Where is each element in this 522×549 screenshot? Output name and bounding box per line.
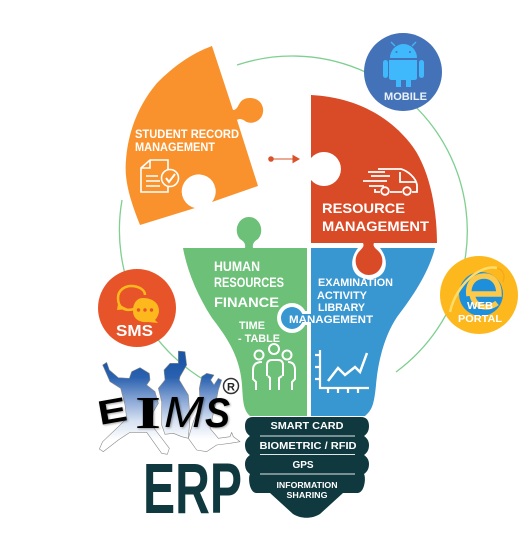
logo lettering: M — [164, 388, 204, 437]
base labels: GPS — [292, 460, 314, 471]
icon: people — [253, 344, 295, 390]
badge: sms: SMS — [116, 323, 153, 340]
text: human resources finance: TIME — [239, 320, 265, 332]
panel: blue examination — [311, 248, 435, 416]
base labels: INFORMATION — [276, 481, 338, 490]
figures — [99, 351, 240, 454]
icon: line chart — [315, 350, 369, 393]
panel: student record management — [126, 46, 263, 225]
panel: green human resources — [183, 217, 307, 416]
text: human resources finance: FINANCE — [214, 294, 279, 310]
logo: EIMS — [95, 351, 240, 454]
logo lettering: I — [135, 387, 161, 438]
badge: web portal: PORTAL — [458, 313, 503, 325]
icon: delivery van — [363, 169, 417, 195]
icon: chat bubbles — [117, 286, 159, 323]
badge: sms — [98, 269, 176, 347]
text: human resources finance — [214, 258, 284, 345]
text: examination activity library management: ACTIVITY — [317, 290, 368, 302]
badge: web portal — [440, 256, 518, 334]
base labels: BIOMETRIC / RFID — [260, 441, 356, 452]
text: examination activity library management — [289, 277, 393, 326]
text: human resources finance: HUMAN — [214, 258, 260, 274]
connector: blue puzzle tab — [277, 303, 311, 333]
panel: bulb base — [245, 417, 369, 518]
text: examination activity library management: EXAMINATION — [318, 277, 393, 289]
heading: student record: STUDENT RECORD — [135, 129, 239, 141]
text: examination activity library management: MANAGEMENT — [289, 314, 373, 326]
logo lettering — [95, 387, 230, 438]
logo lettering: S — [205, 389, 230, 436]
heading: student record: MANAGEMENT — [135, 142, 215, 154]
dividers — [260, 436, 355, 474]
base labels: SHARING — [286, 491, 328, 500]
base labels — [260, 421, 356, 500]
heading: resource management: MANAGEMENT — [322, 218, 429, 234]
badge: mobile: MOBILE — [384, 91, 427, 103]
text: human resources finance: RESOURCES — [214, 274, 284, 290]
registered mark: R — [227, 382, 235, 394]
panel: resource management — [311, 95, 437, 279]
base labels: SMART CARD — [270, 421, 344, 432]
icon: internet explorer — [450, 268, 504, 316]
green orbit ring — [119, 56, 467, 387]
registered mark — [224, 378, 238, 394]
text: human resources finance: - TABLE — [238, 333, 280, 345]
badge: mobile — [364, 33, 442, 111]
arrow — [269, 156, 299, 162]
icon: android — [383, 42, 424, 87]
title: ERP: ERP — [143, 450, 242, 529]
heading: resource management: RESOURCE — [322, 200, 405, 216]
badge: web portal: WEB — [467, 300, 493, 312]
text: examination activity library management: LIBRARY — [318, 302, 366, 314]
icon: document check — [141, 160, 178, 192]
logo lettering: E — [95, 390, 130, 433]
